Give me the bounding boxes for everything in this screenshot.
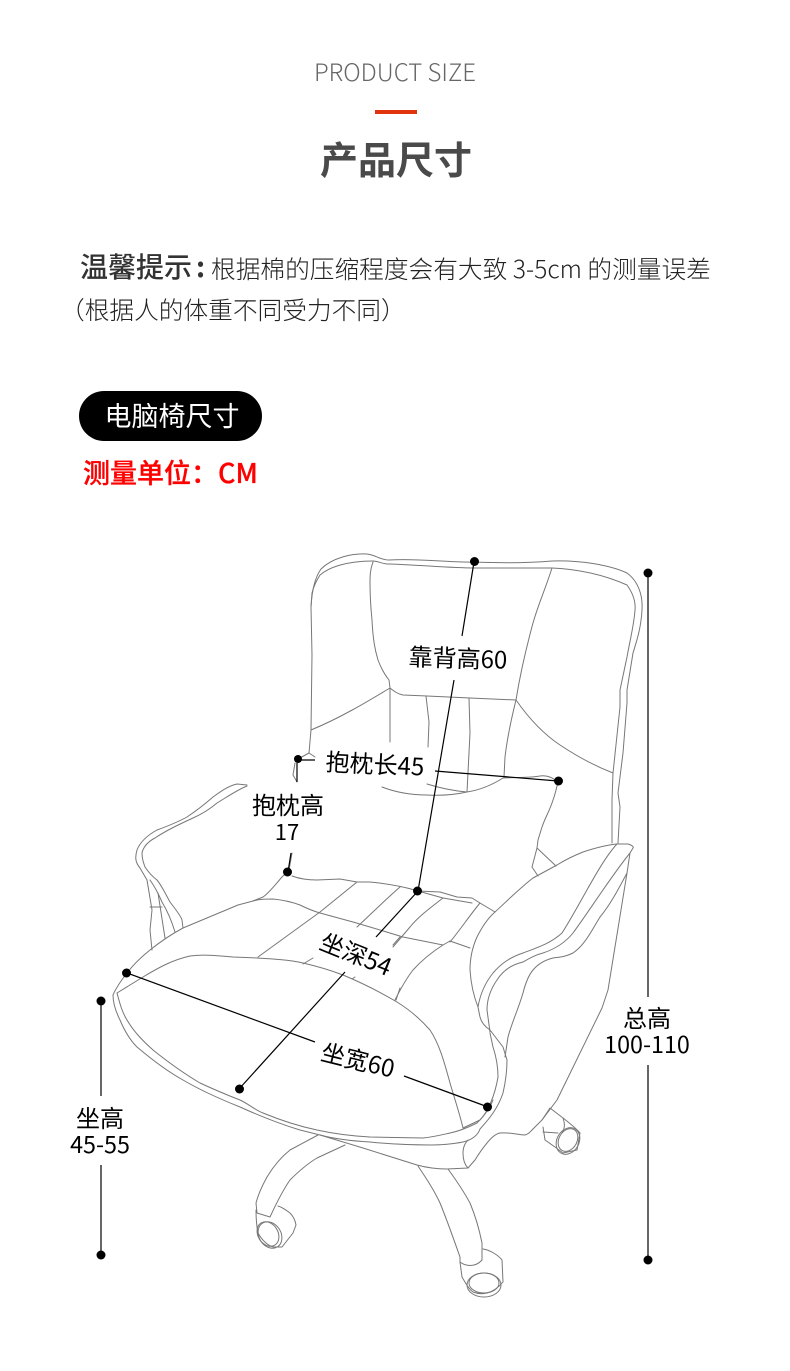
dimension: total height <box>604 568 690 1264</box>
rear caster <box>542 1108 585 1159</box>
dimension: pillow length <box>294 742 563 786</box>
heading: english subtitle: PRODUCT SIZE <box>314 53 476 88</box>
front leg and caster <box>418 1166 503 1297</box>
dimension: pillow height: 17 <box>275 815 299 847</box>
notice text: 温馨提示 <box>80 246 192 286</box>
chair line drawing <box>113 554 642 1297</box>
dimension: seat depth <box>235 891 418 1094</box>
left armrest <box>136 784 247 950</box>
notice text: （根据人的体重不同受力不同） <box>60 291 406 327</box>
measurement unit: 测量单位：CM <box>83 452 258 491</box>
lumbar pillow <box>289 753 558 876</box>
dimension: pillow height <box>252 763 324 876</box>
dimension: total height: 总高 <box>623 999 671 1034</box>
notice text: : <box>196 246 205 286</box>
title: 产品尺寸 <box>320 130 472 185</box>
pill label: computer chair size: 电脑椅尺寸 <box>104 395 240 434</box>
seat cushion <box>113 872 507 1145</box>
dimension: back height <box>408 557 508 896</box>
dimension: pillow length: 抱枕长45 <box>325 742 425 783</box>
dimension: seat width: 坐宽60 <box>318 1033 399 1085</box>
left leg and caster <box>253 1135 345 1253</box>
dimension: seat height: 坐高 <box>76 1099 124 1134</box>
dimension: seat height: 45-55 <box>70 1126 130 1160</box>
chair base front skirt <box>320 1120 542 1169</box>
pill label: computer chair size <box>79 391 262 441</box>
notice text: 根据棉的压缩程度会有大致 3-5cm 的测量误差 <box>211 250 711 286</box>
notice text <box>60 246 711 327</box>
dimension: total height: 100-110 <box>604 1026 690 1060</box>
right armrest <box>470 844 633 1120</box>
heading accent bar <box>375 110 417 114</box>
dimension: pillow height: 抱枕高 <box>252 786 324 821</box>
chair back <box>309 554 642 843</box>
dimension: seat height <box>70 996 130 1260</box>
dimension: seat width <box>122 968 492 1112</box>
dimension: seat depth: 坐深54 <box>315 922 398 983</box>
dimension: back height: 靠背高60 <box>408 637 508 676</box>
